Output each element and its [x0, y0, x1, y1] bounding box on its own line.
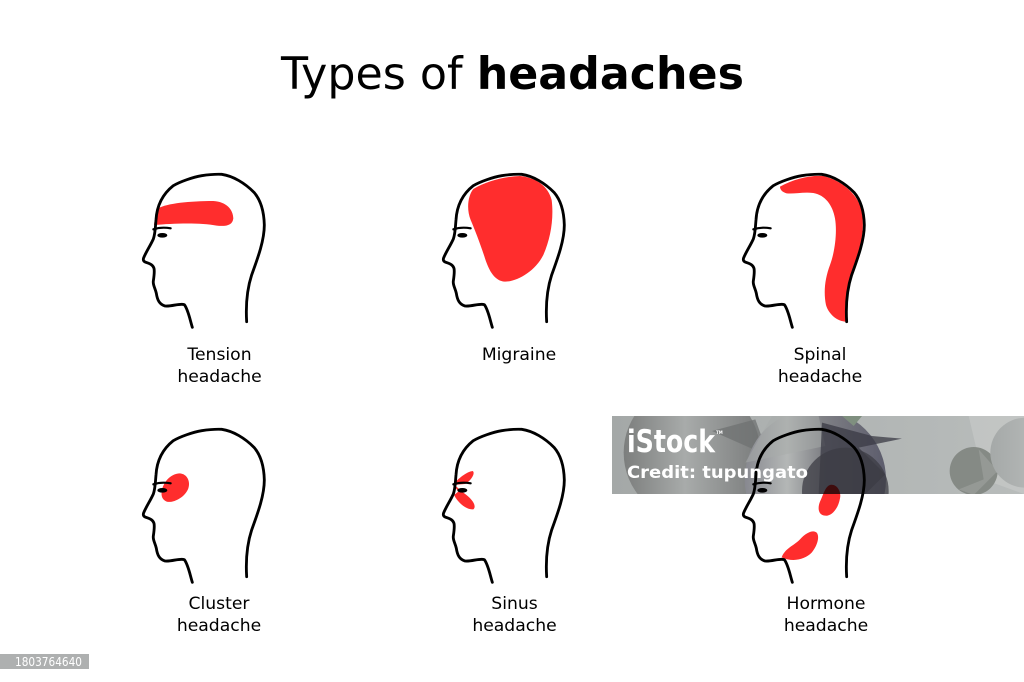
panel: cluster headache — [143, 429, 264, 636]
head profile — [743, 429, 864, 582]
label: cluster headache: headache — [177, 616, 261, 636]
head profile — [143, 429, 264, 582]
label: migraine: Migraine — [482, 345, 556, 365]
panel: migraine — [443, 174, 564, 365]
head profile — [143, 174, 264, 327]
watermark trademark mark: TM — [716, 430, 723, 435]
pain area: around the eye — [162, 473, 189, 502]
watermark credit text: Credit: tupungato — [627, 463, 808, 483]
panel: spinal headache — [743, 174, 864, 387]
pain area: above and below the eye — [453, 471, 475, 509]
label: spinal headache: Spinal — [794, 345, 846, 365]
label: sinus headache: headache — [472, 616, 557, 636]
label: hormone headache: Hormone — [787, 594, 865, 614]
panel: hormone headache — [743, 429, 868, 636]
watermark band — [612, 384, 1024, 550]
panel: tension headache — [143, 174, 264, 387]
head profile — [443, 174, 564, 327]
label: cluster headache: Cluster — [188, 594, 250, 614]
label: sinus headache: Sinus — [491, 594, 538, 614]
label: hormone headache: headache — [784, 616, 868, 636]
pain area: forehead band — [154, 201, 233, 226]
image id tag: 1803764640 — [15, 654, 82, 669]
head profile — [443, 429, 564, 582]
label: tension headache: Tension — [187, 345, 252, 365]
pain area: side of head — [468, 176, 552, 282]
watermark logo text: iStock — [627, 424, 716, 460]
head profile — [743, 174, 864, 327]
pain areas: temple and jaw — [782, 485, 840, 560]
title: Types of headaches — [280, 49, 744, 100]
panel: sinus headache — [443, 429, 564, 636]
label: tension headache: headache — [177, 367, 262, 387]
label: spinal headache: headache — [778, 367, 862, 387]
pain area: crown and back of neck — [780, 176, 863, 322]
